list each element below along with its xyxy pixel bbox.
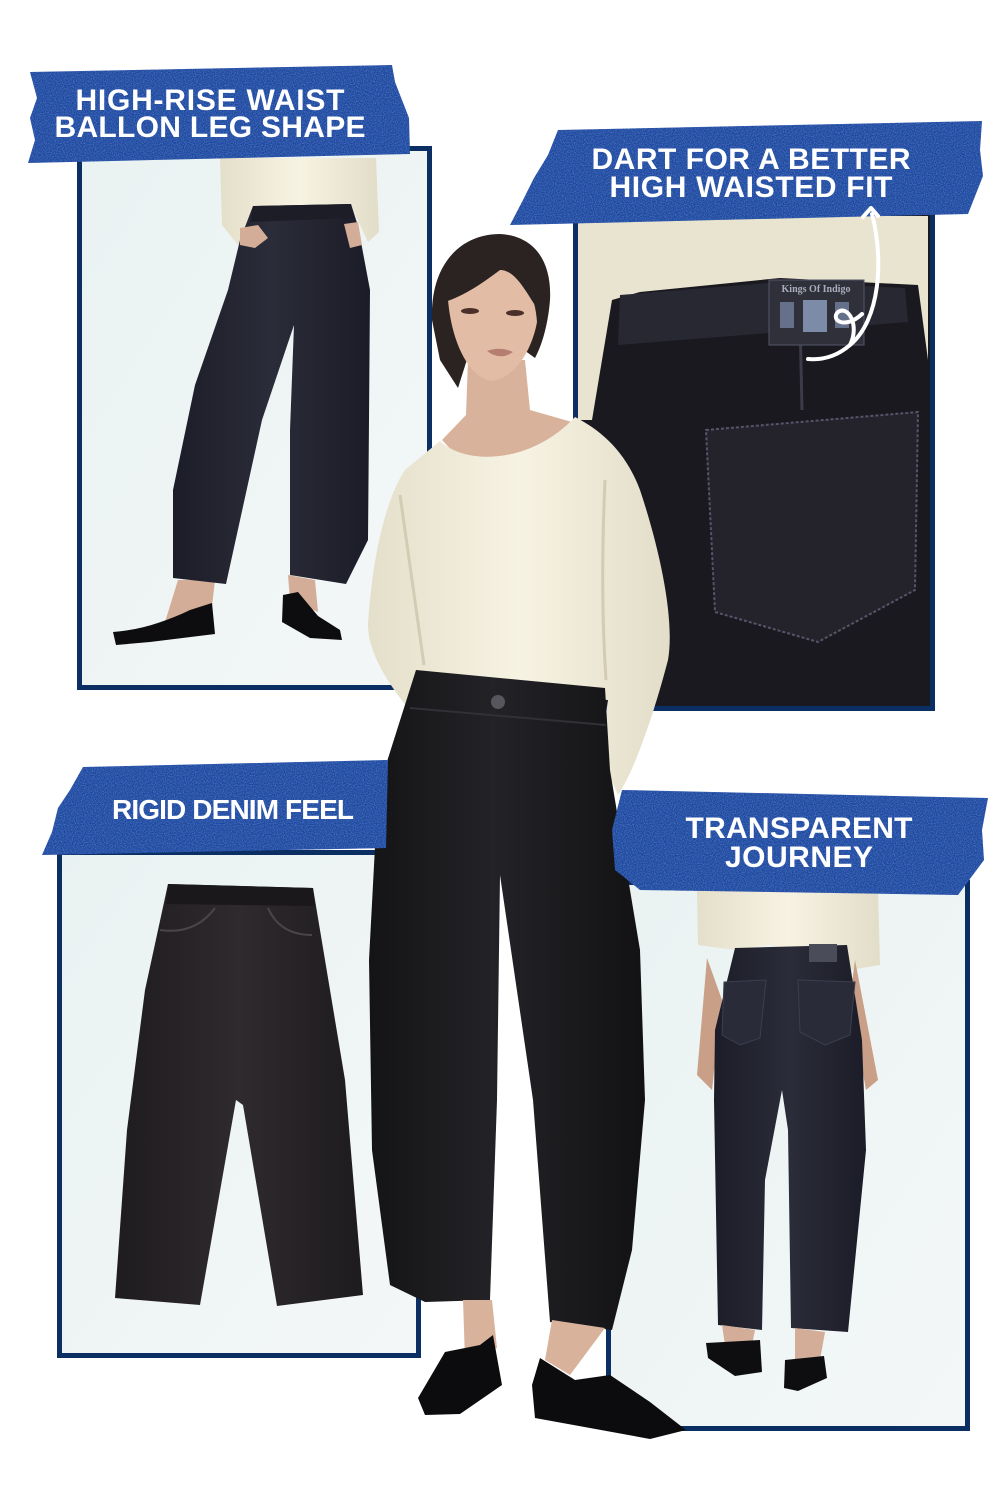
cream top, panel 1 [220, 158, 379, 245]
ankles, panel 4 [722, 1325, 825, 1362]
hair [432, 234, 550, 388]
pocket seams [160, 908, 312, 935]
ankles, panel 1 [165, 575, 318, 622]
cream long-sleeve top [368, 417, 670, 795]
facial features [461, 308, 524, 356]
jeans back view [714, 945, 866, 1332]
waistband, panel 1 [250, 204, 354, 222]
tape label: transparent journey: JOURNEY [725, 841, 873, 874]
fringe [445, 254, 538, 310]
hands [410, 670, 440, 712]
tape label: dart fit [510, 121, 983, 225]
hands in pockets, panel 1 [240, 222, 362, 248]
skin: arms [697, 958, 878, 1090]
jeans, panel 1 [173, 204, 370, 584]
button [491, 695, 505, 709]
jeans label [769, 280, 864, 345]
denim waistband [618, 282, 908, 345]
cream sweater, panel 2 [578, 216, 928, 420]
face [448, 270, 537, 381]
back pocket [706, 412, 918, 642]
tape label: high-rise waist [28, 65, 410, 163]
dart seam [800, 318, 802, 410]
ankles [463, 1300, 605, 1375]
black balloon jeans [369, 670, 645, 1330]
central model [368, 234, 686, 1439]
tape label: rigid denim feel [42, 760, 388, 855]
back pockets, panel 4 [722, 980, 855, 1045]
panel: high-rise waist photo [80, 148, 430, 688]
jeans label: Kings Of Indigo [782, 284, 850, 295]
tape label: high-rise waist: BALLON LEG SHAPE [54, 111, 366, 144]
loafers [418, 1335, 686, 1439]
tape label: dart fit: HIGH WAISTED FIT [610, 171, 892, 204]
flat-lay jeans [115, 884, 363, 1306]
waistband seam [410, 708, 606, 725]
loafers, panel 4 [706, 1340, 827, 1391]
tape label: transparent journey [612, 790, 988, 895]
sleeve seams [400, 480, 606, 680]
tape label: transparent journey: TRANSPARENT [686, 812, 912, 845]
cream top, panel 4 [697, 890, 880, 970]
tape label: dart fit: DART FOR A BETTER [592, 143, 911, 176]
loafers, panel 1 [113, 592, 342, 645]
tape label: rigid denim feel: RIGID DENIM FEEL [112, 794, 354, 825]
arrow: points to waist dart [808, 208, 878, 359]
neck [442, 360, 572, 470]
panel: transparent journey back-view photo [608, 882, 968, 1428]
tape label: high-rise waist: HIGH-RISE WAIST [76, 84, 344, 117]
back label, panel 4 [809, 944, 837, 962]
panel: rigid denim product photo [60, 852, 418, 1356]
panel: dart detail photo [576, 212, 932, 708]
